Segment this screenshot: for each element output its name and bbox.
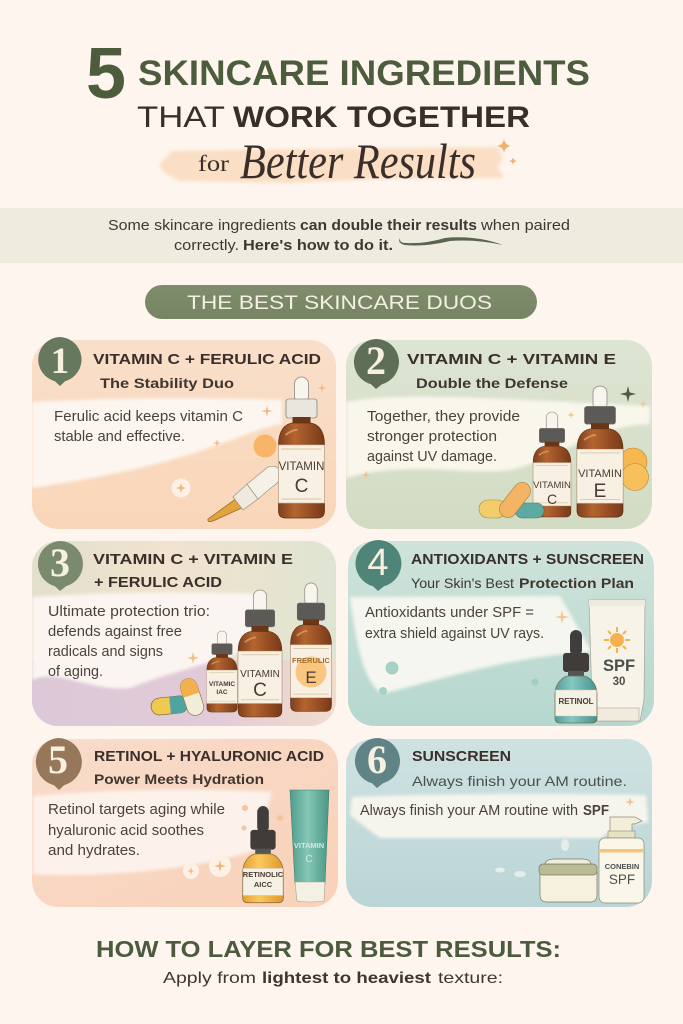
icon: vitamin E bottle — [577, 386, 623, 517]
card body: stronger protection — [367, 429, 497, 445]
icon: small bottle — [207, 631, 237, 712]
card body: Ultimate protection trio: — [48, 604, 210, 620]
heading line: skincare ingredients: SKINCARE INGREDIENTS — [138, 54, 590, 93]
intro text: correctly. — [174, 237, 239, 254]
icon: fallen dropper — [208, 466, 280, 522]
section heading: THE BEST SKINCARE DUOS — [187, 292, 492, 314]
icon: vitamin E bottle: E — [594, 481, 606, 502]
number badge 6 — [355, 737, 400, 788]
icon: vitamin C bottle: VITAMIN — [279, 461, 324, 473]
card body: Always finish your AM routine with — [360, 803, 578, 819]
number badge 1: 1 — [51, 341, 69, 382]
card body: stable and effective. — [54, 429, 185, 445]
icon: sparkles — [497, 139, 517, 165]
card body: radicals and signs — [48, 644, 163, 660]
number badge 5: 5 — [48, 737, 68, 782]
card subtitle: Your Skin's Best — [411, 575, 514, 591]
decorations: bubbles and sparkle — [379, 610, 569, 695]
icons: capsules — [479, 479, 544, 521]
icon: vitamin C bottle — [533, 412, 571, 517]
card body: SPF — [583, 803, 609, 819]
white wash area — [33, 790, 272, 875]
card subtitle: The Stability Duo — [100, 375, 234, 391]
title — [86, 34, 590, 189]
icon: vitamin C bottle: VITAMIN — [533, 480, 571, 491]
number badge 3: 3 — [50, 540, 70, 585]
card subtitle: Double the Defense — [416, 375, 568, 391]
decorations: sparkles and orange circle — [172, 383, 327, 498]
decorations: small orange sparkles — [361, 400, 647, 480]
card body: against UV damage. — [367, 449, 497, 465]
number badge 2: 2 — [366, 338, 386, 383]
icon: retinol bottle — [555, 630, 597, 723]
card body: defends against free — [48, 624, 182, 640]
icon: vitamin C bottle: C — [295, 476, 308, 497]
card title: VITAMIN C + VITAMIN E — [407, 351, 616, 368]
icon: green tube: VITAMIN — [294, 841, 324, 850]
for better results: for — [198, 151, 229, 176]
card body: Antioxidants under SPF = — [365, 605, 534, 621]
intro text: can double their results — [300, 217, 477, 234]
card body: hyaluronic acid soothes — [48, 823, 204, 839]
section pill — [145, 285, 537, 319]
card body: extra shield against UV rays. — [365, 626, 544, 642]
icon: SPF pump bottle — [599, 817, 644, 903]
icon: green tube: C — [305, 854, 313, 865]
icon: small bottle: VITAMIC — [209, 681, 235, 688]
card body: Ferulic acid keeps vitamin C — [54, 409, 243, 425]
heading line: that work together: WORK TOGETHER — [233, 101, 530, 134]
number badge 4: 4 — [367, 542, 389, 584]
number badge 2 — [354, 338, 399, 389]
icon: ferulic E bottle — [291, 583, 331, 711]
icon: vitamin E bottle: VITAMIN — [578, 468, 622, 480]
white wash area — [32, 593, 262, 688]
card title: SUNSCREEN — [412, 748, 511, 765]
decorations: sparkles — [620, 386, 636, 402]
icon: vitamin C bottle: C — [253, 680, 267, 701]
card title: ANTIOXIDANTS + SUNSCREEN — [411, 551, 644, 568]
icon: ferulic E bottle: FRERULIC — [292, 656, 331, 665]
icon: vitamin C bottle — [278, 377, 324, 518]
icon: green tube — [290, 790, 329, 902]
icon: SPF tube: 30 — [613, 676, 625, 688]
card title: VITAMIN C + VITAMIN E — [93, 551, 293, 568]
icon: SPF pump bottle: SPF — [609, 872, 635, 887]
intro text: Here's how to do it. — [243, 237, 393, 254]
card title: RETINOL + HYALURONIC ACID — [94, 748, 324, 765]
card subtitle: Power Meets Hydration — [94, 771, 264, 787]
panel: card 5 retinol + hyaluronic acid — [32, 737, 338, 907]
card body: Together, they provide — [367, 409, 520, 425]
card subtitle: Always finish your AM routine. — [412, 773, 627, 789]
icons: capsules — [150, 676, 206, 718]
white wash area — [350, 596, 592, 694]
card title: VITAMIN C + FERULIC ACID — [93, 351, 321, 368]
big number 5: 5 — [86, 34, 126, 114]
for better results: Better Results — [240, 133, 476, 189]
intro strip — [0, 208, 683, 263]
white wash band — [350, 794, 648, 838]
layering instruction: Apply from — [163, 970, 256, 987]
intro text: when paired — [480, 217, 570, 234]
number badge 5 — [36, 737, 82, 790]
panel: card 4 antioxidants + sunscreen — [348, 540, 654, 726]
card subtitle: Protection Plan — [519, 575, 634, 591]
icon: SPF pump bottle: CONEBIN — [605, 862, 639, 871]
decorations: sparkle and splashes — [495, 797, 635, 877]
panel: card 6 sunscreen — [346, 737, 652, 907]
number badge 3 — [38, 540, 83, 591]
lower colour wash — [32, 660, 336, 726]
icon: vitamin C bottle: VITAMIN — [240, 669, 280, 680]
number badge 4 — [355, 540, 401, 591]
white wash area — [346, 397, 650, 478]
card body: and hydrates. — [48, 843, 140, 859]
decorations: sparkle — [187, 652, 199, 664]
card title: + FERULIC ACID — [94, 574, 222, 591]
card body: of aging. — [48, 664, 103, 680]
icon: SPF tube: SPF — [603, 657, 635, 675]
icon: retinolic acid bottle: RETINOLIC — [243, 870, 284, 879]
icon: vitamin C bottle: C — [547, 491, 557, 507]
layering instruction: texture: — [438, 970, 503, 987]
squiggle underline — [399, 237, 503, 246]
icon: vitamin C bottle — [238, 590, 282, 717]
icon: small bottle: IAC — [216, 689, 228, 696]
number badge 6: 6 — [367, 737, 387, 782]
brush stroke behind script text — [159, 147, 504, 183]
icon: orange softgels — [619, 448, 648, 490]
panel: card 3 vitamin C + E + ferulic — [32, 540, 336, 726]
icon: retinolic acid bottle: AICC — [254, 880, 273, 889]
heading line: that work together: THAT — [137, 101, 225, 134]
panel: card 1 vitamin C + ferulic acid — [32, 337, 336, 529]
icon: ferulic E bottle: E — [305, 668, 317, 687]
icon: cream jar — [539, 859, 597, 902]
white wash area — [32, 398, 282, 488]
panel: card 2 vitamin C + vitamin E — [346, 338, 652, 529]
icon: retinolic acid bottle — [243, 806, 284, 903]
layering heading: HOW TO LAYER FOR BEST RESULTS: — [96, 936, 561, 962]
card body: Retinol targets aging while — [48, 802, 225, 818]
intro text: Some skincare ingredients — [108, 217, 296, 234]
icon: SPF tube — [589, 600, 645, 721]
number badge 1 — [38, 337, 82, 386]
layering instruction: lightest to heaviest — [262, 970, 432, 987]
icon: retinol bottle: RETINOL — [558, 697, 594, 706]
decorations: dots and sparkles — [183, 805, 283, 879]
